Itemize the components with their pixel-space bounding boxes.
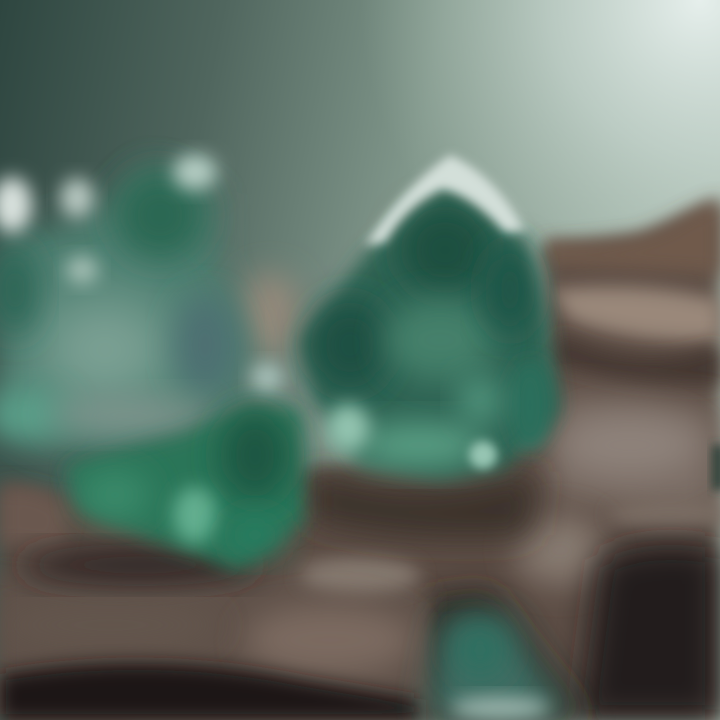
rock foreground left	[0, 273, 540, 720]
lower left crystal	[65, 405, 305, 570]
white tips	[0, 177, 32, 233]
left crystal cluster, pale upper part	[0, 154, 283, 450]
white crest of right crystal	[365, 155, 525, 245]
right crystal	[300, 155, 560, 480]
small bottom crystal	[425, 615, 575, 720]
rock base: brown strata	[0, 200, 720, 720]
